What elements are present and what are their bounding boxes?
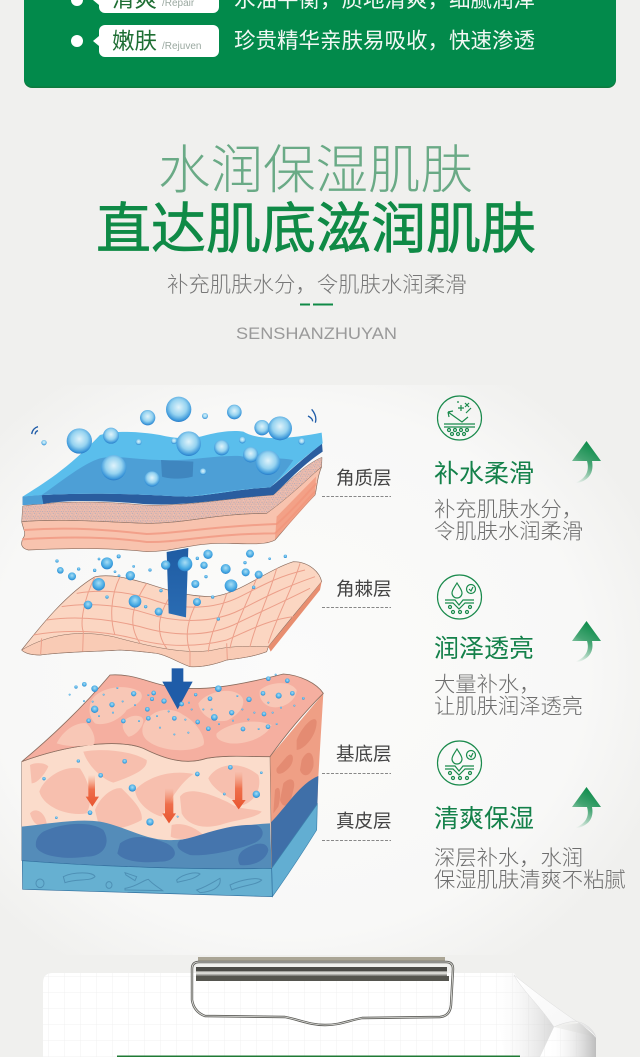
clipboard paper — [43, 973, 596, 1057]
page curl shadow — [490, 973, 554, 1057]
red arrows: absorption — [86, 772, 246, 823]
description — [434, 846, 626, 892]
diagram background glow — [0, 385, 640, 955]
description: 深层补水，水润 — [434, 846, 583, 870]
label: 基底层 — [322, 744, 392, 774]
icon: blue down arrow — [162, 668, 193, 709]
description: 大量补水， — [434, 672, 540, 696]
heading: 清爽保湿 — [434, 805, 534, 833]
page curl — [514, 975, 596, 1038]
description: 补充肌肤水分， — [434, 498, 583, 522]
green dash divider — [300, 304, 333, 306]
icon: droplet on skin — [438, 741, 482, 785]
benefit row: 嫩肤: 珍贵精华亲肤易吸收，快速渗透 — [234, 29, 535, 53]
label: 角质层 — [322, 468, 392, 496]
arrow: up — [572, 621, 601, 663]
title: light line: 水润保湿肌肤 — [158, 141, 473, 200]
arrow: up — [572, 787, 601, 829]
description — [434, 672, 583, 718]
subtitle: 补充肌肤水分，令肌肤水润柔滑 — [167, 273, 466, 297]
label: 真皮层: 真皮层 — [336, 810, 392, 832]
arrow: up — [572, 441, 601, 484]
label: 角质层: 角质层 — [336, 468, 392, 488]
arrow: blue shaft through layers — [167, 548, 188, 617]
water droplets: middle layer — [55, 550, 287, 621]
benefit row: 嫩肤 — [71, 25, 535, 57]
label: 基底层: 基底层 — [336, 744, 392, 764]
skin layers diagram — [22, 397, 323, 897]
description: 保湿肌肤清爽不粘腻 — [434, 868, 626, 892]
feature: 润泽透亮 — [434, 575, 601, 718]
water droplets: top layer — [32, 397, 316, 487]
english caption: SENSHANZHUYAN — [236, 324, 397, 343]
green rule — [117, 1056, 520, 1057]
label: 角棘层: 角棘层 — [336, 578, 392, 600]
benefit row: 清爽 — [71, 0, 535, 13]
panel: green benefits panel — [24, 0, 616, 88]
title: bold line: 直达肌底滋润肌肤 — [96, 198, 536, 260]
layer: basal and dermis block — [22, 668, 323, 897]
layer: stratum corneum with water sheet — [22, 431, 323, 552]
feature: 清爽保湿 — [434, 741, 626, 892]
benefit row: 嫩肤: /Rejuven — [162, 41, 201, 52]
icon: skin sparkle — [438, 396, 482, 440]
label: 真皮层 — [322, 810, 392, 840]
water droplets: lower block — [42, 674, 305, 826]
benefit row: 嫩肤: 嫩肤 — [112, 29, 157, 54]
heading: 补水柔滑 — [434, 460, 534, 488]
description — [434, 498, 583, 544]
icon: droplet on skin — [438, 575, 482, 619]
description: 让肌肤润泽透亮 — [434, 694, 583, 718]
metal clip — [192, 957, 453, 1025]
heading: 润泽透亮 — [434, 635, 534, 663]
feature: 补水柔滑 — [434, 396, 601, 544]
layer: stratum spinosum mesh — [22, 562, 322, 667]
label: 角棘层 — [322, 578, 392, 608]
description: 令肌肤水润柔滑 — [434, 520, 583, 544]
